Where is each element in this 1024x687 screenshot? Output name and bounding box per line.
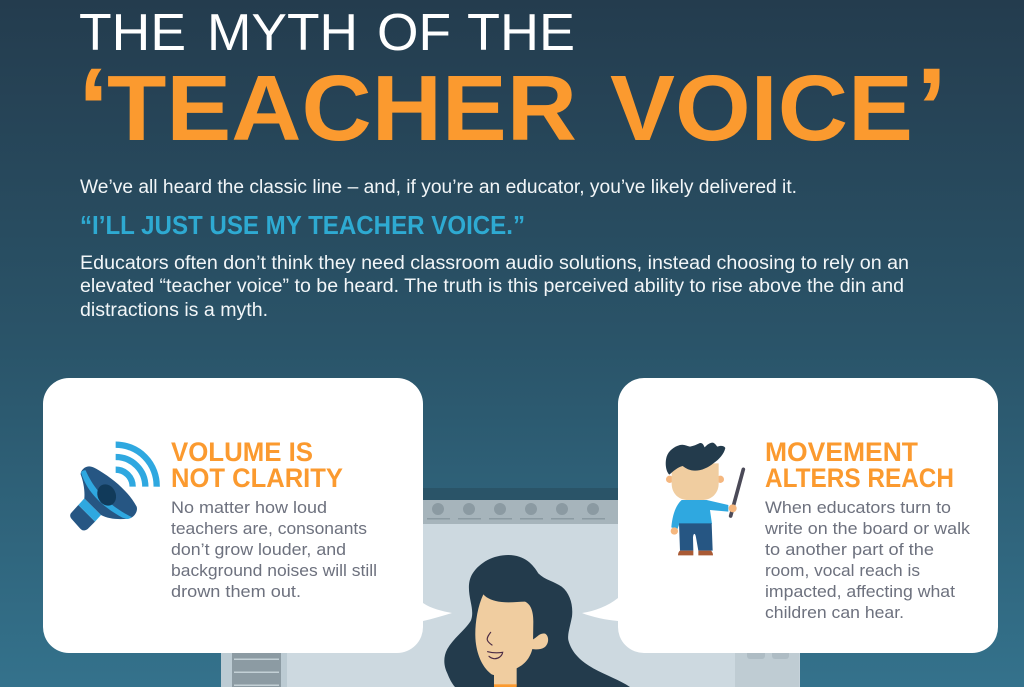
face bbox=[475, 594, 533, 675]
title line 2: VOICE bbox=[610, 56, 913, 160]
title line 1: MYTH bbox=[207, 4, 358, 62]
rail bolts bbox=[432, 503, 599, 515]
quote heading: “I’LL JUST USE MY TEACHER VOICE.” bbox=[80, 210, 525, 240]
right panel bbox=[735, 640, 800, 687]
icon: teacher with pointer bbox=[666, 443, 743, 555]
card text: write on the board or walk bbox=[764, 519, 971, 538]
left shutter bbox=[221, 640, 287, 687]
card body bbox=[582, 378, 998, 653]
card text: to another part of the bbox=[765, 540, 934, 559]
card body bbox=[43, 378, 452, 653]
card text: children can hear. bbox=[765, 603, 904, 622]
ear bbox=[532, 633, 548, 649]
card text bbox=[764, 498, 971, 622]
title line 1: THE bbox=[79, 4, 186, 62]
title line 2: ‘ bbox=[78, 45, 109, 170]
card: volume is not clarity bbox=[43, 378, 452, 653]
card text: When educators turn to bbox=[765, 498, 951, 517]
card text: impacted, affecting what bbox=[765, 582, 955, 601]
card heading bbox=[171, 437, 343, 493]
card text: teachers are, consonants bbox=[171, 519, 367, 538]
title line 1 bbox=[79, 4, 575, 62]
title line 2: ’ bbox=[916, 45, 947, 170]
card text bbox=[171, 498, 377, 601]
card text: don’t grow louder, and bbox=[171, 540, 346, 559]
board rail bbox=[221, 500, 800, 524]
card heading bbox=[765, 437, 954, 493]
woman teacher bbox=[444, 555, 630, 687]
intro sentence: We’ve all heard the classic line – and, if you’re an educator, you’ve likely delivered it. bbox=[80, 177, 797, 198]
mouth bbox=[488, 652, 503, 659]
card heading: ALTERS REACH bbox=[765, 463, 954, 493]
card heading: VOLUME IS bbox=[171, 437, 313, 467]
card heading: MOVEMENT bbox=[765, 437, 918, 467]
title line 1: THE bbox=[467, 4, 575, 62]
card text: drown them out. bbox=[171, 582, 301, 601]
card text: No matter how loud bbox=[171, 498, 327, 517]
intro paragraph: distractions is a myth. bbox=[80, 300, 268, 321]
rail lines bbox=[427, 518, 605, 520]
card: movement alters reach bbox=[582, 378, 998, 653]
title line 2 bbox=[78, 45, 947, 170]
nose bbox=[487, 632, 492, 645]
title bbox=[78, 4, 947, 170]
icon: megaphone bbox=[70, 445, 157, 530]
classroom board illustration bbox=[221, 488, 800, 687]
card text: room, vocal reach is bbox=[765, 561, 920, 580]
collar bbox=[494, 684, 517, 687]
board surface bbox=[221, 524, 800, 687]
title line 1: OF bbox=[377, 4, 451, 62]
card heading: NOT CLARITY bbox=[171, 463, 343, 493]
hair bbox=[444, 555, 630, 687]
intro paragraph: Educators often don’t think they need classroom audio solutions, instead choosing to rely on an bbox=[80, 253, 909, 274]
intro paragraph bbox=[80, 253, 909, 321]
title line 2: TEACHER bbox=[107, 56, 577, 160]
intro paragraph: elevated “teacher voice” to be heard. The truth is this perceived ability to rise above the din and bbox=[80, 276, 904, 297]
top band bbox=[221, 488, 800, 501]
card text: background noises will still bbox=[171, 561, 377, 580]
neck bbox=[494, 665, 517, 686]
